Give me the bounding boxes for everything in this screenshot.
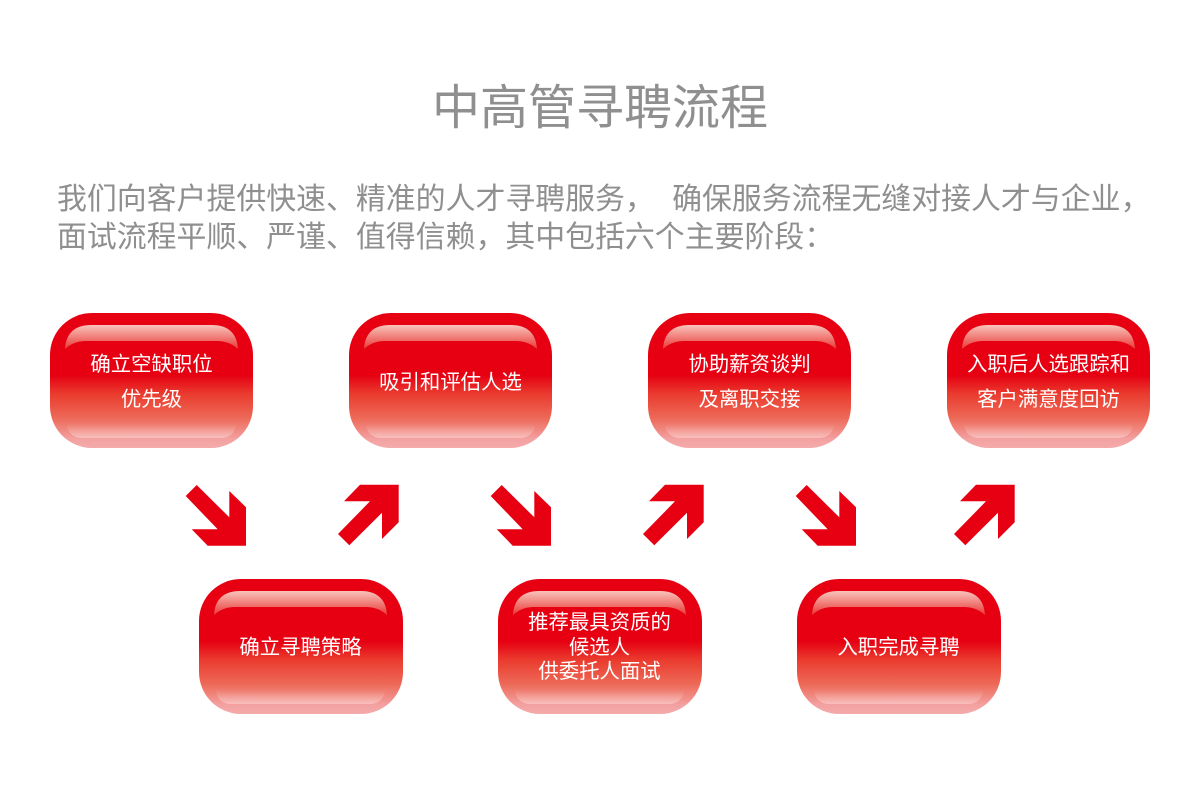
step box: 确立空缺职位优先级: 优先级 [121, 389, 182, 411]
step box: 协助薪资谈判及离职交接: 协助薪资谈判 [688, 354, 811, 376]
step box: 入职后人选跟踪和客户满意度回访: 入职后人选跟踪和 [967, 354, 1130, 376]
step box: 入职后人选跟踪和客户满意度回访 [947, 313, 1150, 448]
arrow: down-right 3 [796, 485, 856, 546]
step box: 确立寻聘策略 [199, 579, 403, 714]
arrow: down-right 1 [186, 485, 246, 546]
arrow: up-right 1 [338, 484, 399, 546]
step box: 入职完成寻聘: 入职完成寻聘 [837, 637, 960, 659]
arrow: up-right 3 [954, 484, 1015, 546]
step box: 吸引和评估人选 [349, 313, 552, 448]
arrow: down-right 2 [490, 485, 551, 546]
arrow: up-right 2 [643, 484, 704, 546]
step box: 吸引和评估人选: 吸引和评估人选 [379, 372, 522, 394]
intro text [57, 183, 1150, 254]
step box: 确立寻聘策略: 确立寻聘策略 [239, 637, 362, 659]
step box: 协助薪资谈判及离职交接 [648, 313, 851, 448]
step box: 入职后人选跟踪和客户满意度回访: 客户满意度回访 [977, 389, 1120, 411]
step box: 入职完成寻聘 [797, 579, 1001, 714]
step box: 推荐最具资质的候选人供委托人面试 [498, 579, 702, 714]
step box: 推荐最具资质的候选人供委托人面试: 供委托人面试 [538, 661, 661, 683]
step box: 推荐最具资质的候选人供委托人面试: 候选人 [569, 637, 630, 659]
step box: 确立空缺职位优先级 [50, 313, 253, 448]
intro text: 我们向客户提供快速、精准的人才寻聘服务， 确保服务流程无缝对接人才与企业， [57, 183, 1150, 216]
intro text: 面试流程平顺、严谨、值得信赖，其中包括六个主要阶段： [57, 221, 834, 254]
step box: 推荐最具资质的候选人供委托人面试: 推荐最具资质的 [528, 612, 671, 634]
step box: 协助薪资谈判及离职交接: 及离职交接 [699, 389, 800, 411]
step box: 确立空缺职位优先级: 确立空缺职位 [90, 354, 213, 376]
title: 中高管寻聘流程 [432, 82, 768, 135]
